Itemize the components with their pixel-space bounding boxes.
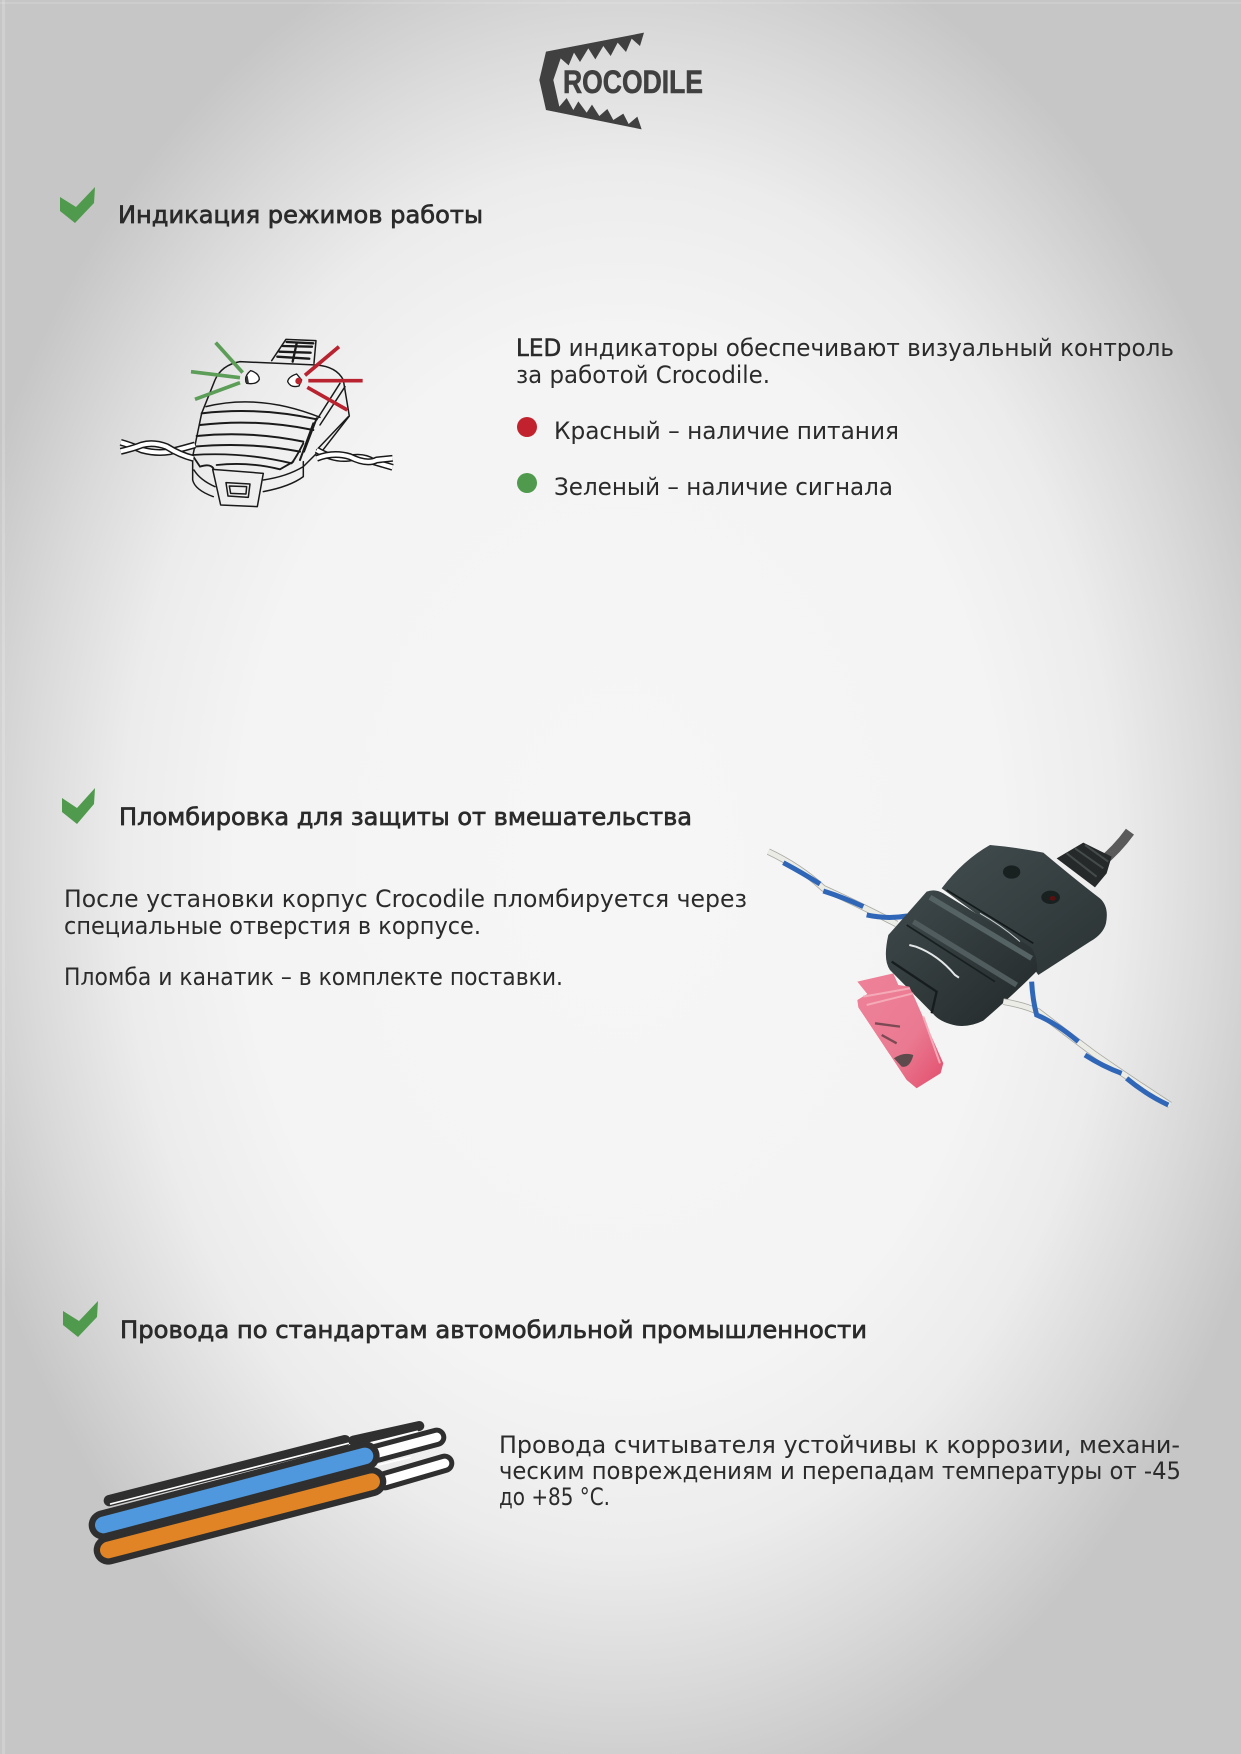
text block: sealing description: Пломба и канатик – в комплекте поставки.: [64, 963, 563, 991]
pink seal: [857, 973, 943, 1088]
logo: Crocodile: [539, 33, 703, 129]
legend: green LED: Зеленый – наличие сигнала: [554, 473, 893, 501]
heading: tamper sealing: Пломбировка для защиты от вмешательства: [119, 803, 692, 831]
illustration: device line drawing with LEDs: [121, 339, 393, 507]
illustration: coloured wires: [103, 1426, 445, 1550]
icon: check mark 2: [62, 788, 95, 824]
text block: wire description: ческим повреждениям и перепадам температуры от -45: [499, 1457, 1181, 1485]
text block: wire description: [499, 1431, 1181, 1511]
logo: Crocodile: ROCODILE: [563, 64, 703, 100]
icon: check mark 1: [60, 187, 95, 223]
left twisted wire strands: [121, 442, 195, 458]
text block: sealing description: [64, 885, 747, 991]
cable and strain relief: [1057, 832, 1130, 887]
right twisted wire strands: [317, 450, 393, 467]
front ridged body: [886, 890, 1037, 1026]
text block: wire description: Провода считывателя устойчивы к коррозии, механи-: [499, 1431, 1180, 1459]
icon: check mark 3: [63, 1301, 98, 1337]
text block: sealing description: После установки корпус Crocodile пломбируется через: [64, 885, 747, 913]
text block: sealing description: специальные отверстия в корпусе.: [64, 912, 481, 940]
text block: LED description: [516, 334, 1174, 389]
photo: sealed device with twisted wires: [768, 832, 1170, 1105]
right twisted wire: [1003, 982, 1170, 1105]
text block: wire description: до +85 °C.: [499, 1483, 610, 1511]
text block: LED description: за работой Crocodile.: [516, 361, 770, 389]
heading: operating mode indication: Индикация режимов работы: [118, 201, 483, 229]
rear body with LEDs: [942, 845, 1107, 975]
heading: automotive grade wires: Провода по стандартам автомобильной промышленности: [120, 1316, 867, 1344]
left twisted wire: [768, 852, 907, 924]
text block: LED description: LED индикаторы обеспечивают визуальный контроль: [516, 334, 1174, 362]
legend: red LED: Красный – наличие питания: [554, 417, 899, 445]
